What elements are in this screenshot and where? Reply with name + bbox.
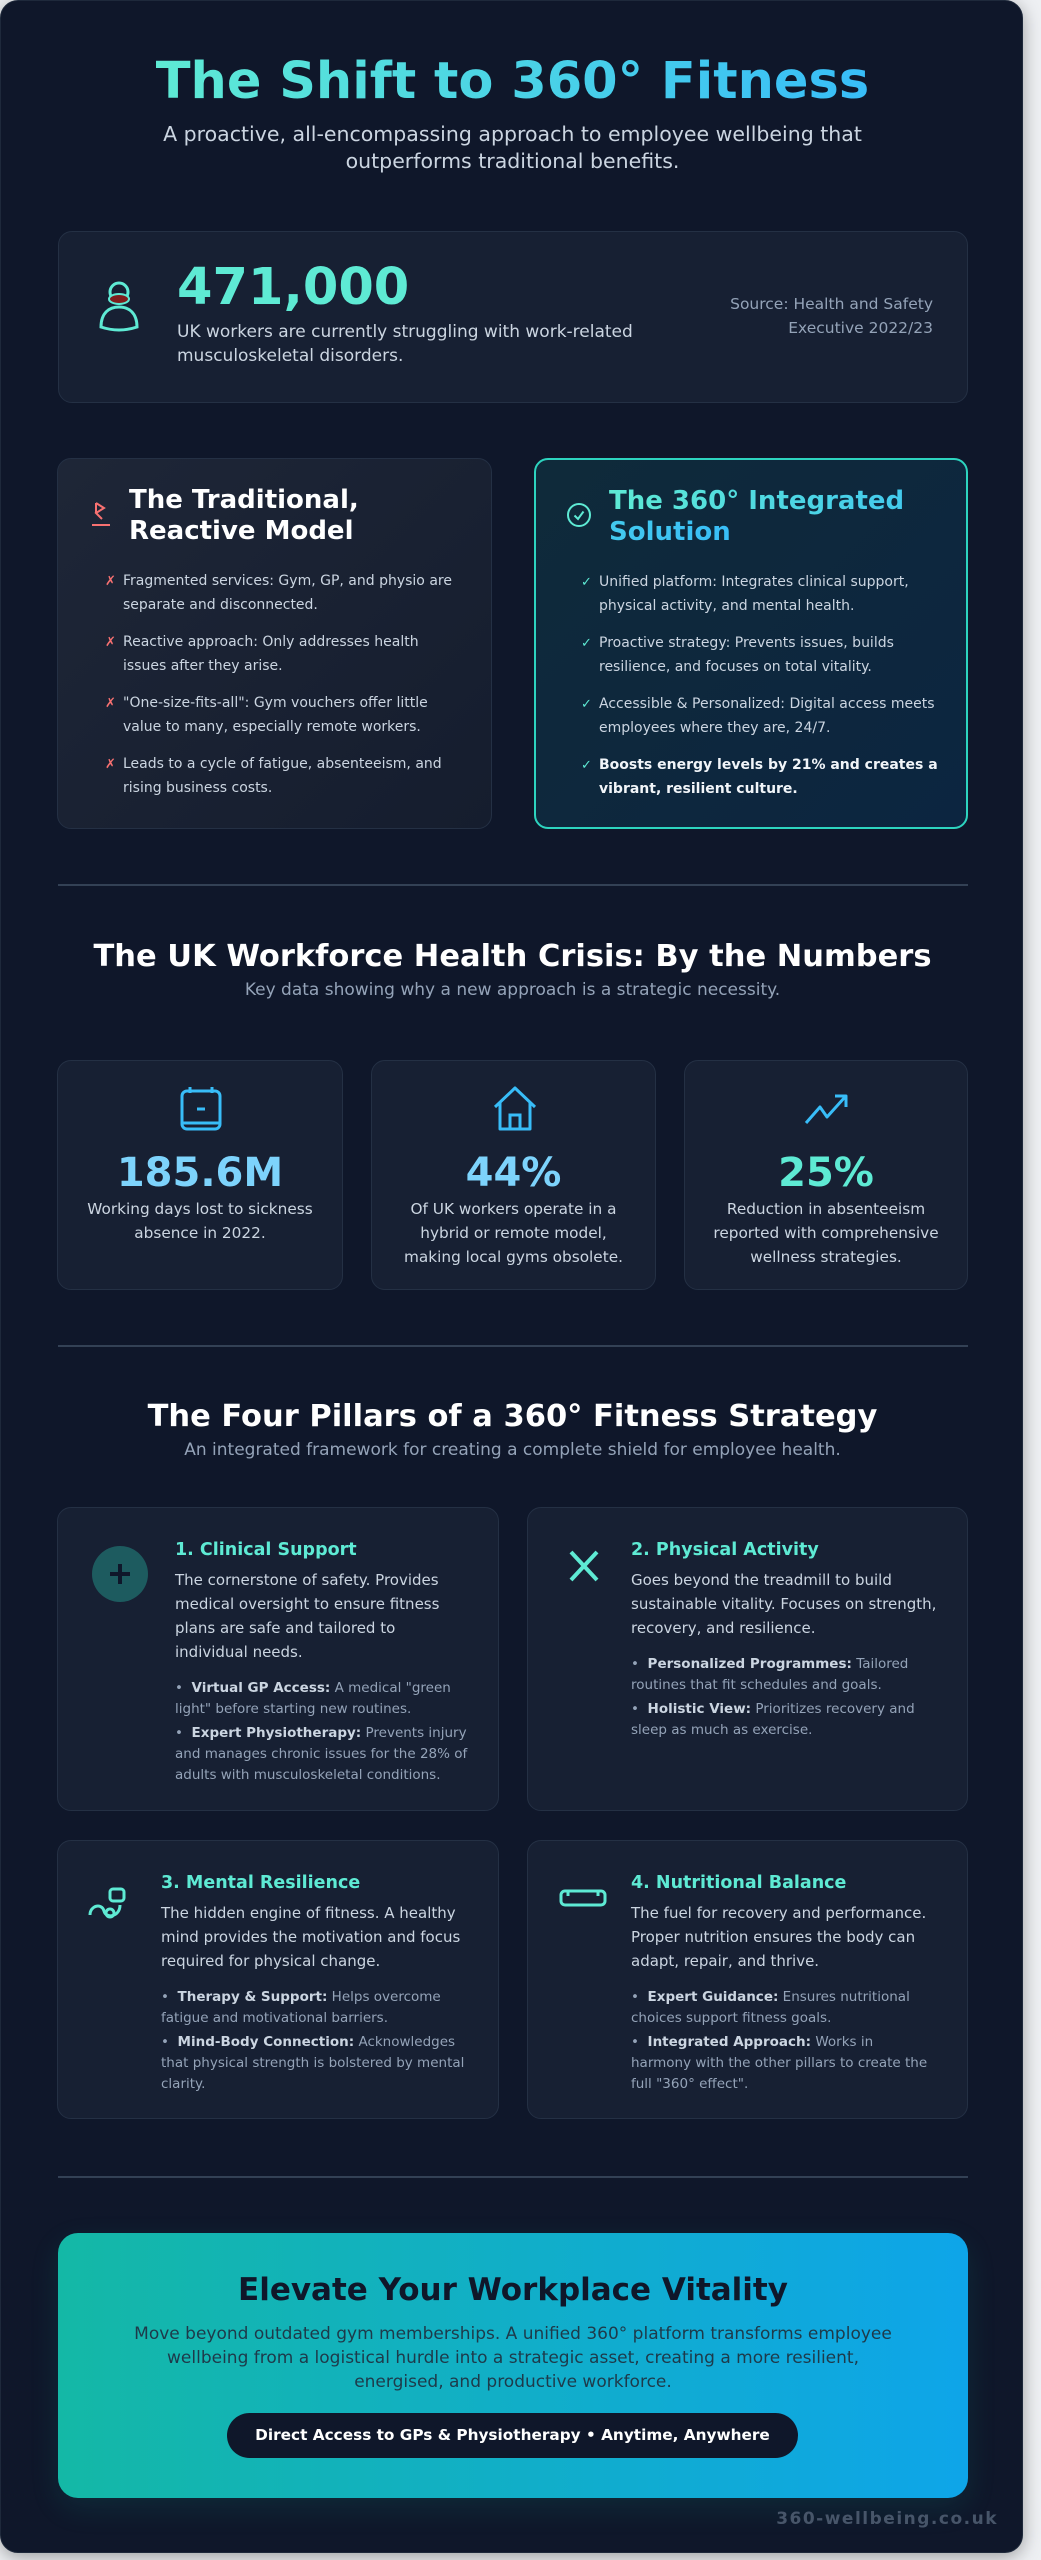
panel: traditional model: [57, 458, 492, 829]
CTA body: Move beyond outdated gym memberships. A unified 360° platform transforms employee wellbeing from a logistical hurdle into a strategic asset, creating a more resilient, energised, and productive workforce.: [134, 2324, 892, 2392]
source: Source: Health and Safety Executive 2022/23: [730, 295, 933, 337]
big number: 471,000: [177, 258, 409, 317]
stat card: absenteeism: Reduction in absenteeism: [727, 1200, 925, 1218]
pillar card: physical activity: Goes beyond the treadmill to build sustainable vitality. Focuses on strength, recovery, and resilience.: [631, 1571, 936, 1637]
heading: Solution: [609, 517, 731, 547]
pillar card: nutrition: • Integrated Approach: Works in harmony with the other pillars to create the full "360° effect".: [631, 2034, 927, 2092]
list: problems: Fragmented services: Gym, GP, and physio are separate and disconnected.: [123, 573, 452, 613]
list: benefits: Boosts energy levels by 21% and creates a vibrant, resilient culture.: [599, 757, 938, 797]
stat card: absenteeism: [684, 1060, 968, 1290]
list: benefits: Proactive strategy: Prevents issues, builds resilience, and focuses on total vitality.: [599, 635, 894, 675]
heading: Reactive Model: [129, 516, 353, 546]
pillar card: clinical support: 1. Clinical Support: [175, 1540, 357, 1560]
panel: 360 solution: ✓: [581, 575, 592, 590]
pillar card: physical activity: 2. Physical Activity: [631, 1540, 819, 1560]
icon: calendar: [180, 1087, 222, 1130]
stat card: days lost: [57, 1060, 343, 1290]
heading: pillars section: An integrated framework for creating a complete shield for employee health.: [184, 1440, 841, 1460]
stat card: absenteeism: 25%: [778, 1150, 874, 1196]
heading: pillars section: [148, 1399, 877, 1460]
stat card: hybrid: 44%: [466, 1150, 561, 1196]
heading: [609, 486, 904, 547]
pillar card: physical activity: • Personalized Programmes: Tailored routines that fit schedules and goals.: [631, 1656, 908, 1693]
icon: house: [494, 1086, 536, 1130]
panel: call to action: [58, 2233, 968, 2498]
list: problems: Reactive approach: Only addresses health issues after they arise.: [123, 634, 419, 674]
pillar card: mental resilience: The hidden engine of fitness. A healthy mind provides the motivation and focus required for physical change.: [161, 1904, 460, 1970]
stat card: hybrid: making local gyms obsolete.: [404, 1248, 623, 1266]
list: benefits: Unified platform: Integrates clinical support, physical activity, and mental health.: [599, 574, 909, 614]
pillar card: clinical support: The cornerstone of safety. Provides medical oversight to ensure fitness plans are safe and tailored to individual needs.: [175, 1571, 439, 1661]
stat card: days lost: 185.6M: [117, 1150, 283, 1196]
panel: 360 solution: ✓: [581, 758, 592, 773]
stat card: days lost: absence in 2022.: [134, 1224, 266, 1242]
panel: 360 solution: ✓: [581, 697, 592, 712]
list: problems: Leads to a cycle of fatigue, absenteeism, and rising business costs.: [123, 756, 442, 796]
icon: check circle: [567, 503, 591, 527]
pillar card: mental resilience: • Mind-Body Connection: Acknowledges that physical strength is bolstered by mental clarity.: [161, 2034, 464, 2092]
pillar card: nutrition: [527, 1840, 968, 2119]
icon: warning: [92, 502, 110, 526]
icon: brain: [88, 1888, 126, 1918]
pillar card: nutrition: • Expert Guidance: Ensures nutritional choices support fitness goals.: [631, 1989, 910, 2026]
pillar card: physical activity: • Holistic View: Prioritizes recovery and sleep as much as exercise.: [631, 1701, 915, 1738]
pillar card: nutrition: The fuel for recovery and performance. Proper nutrition ensures the body can adapt, repair, and thrive.: [631, 1904, 926, 1970]
stat card: hybrid: [371, 1060, 656, 1290]
panel: traditional model: ✗: [105, 696, 116, 711]
heading: numbers section: [93, 939, 932, 1000]
pillar card: clinical support: • Expert Physiotherapy: Prevents injury and manages chronic issues for the 28% of adults with musculoskeletal conditions.: [175, 1725, 467, 1783]
panel: key stat banner: [58, 231, 968, 403]
stat card: hybrid: Of UK workers operate in a: [410, 1200, 616, 1218]
icon: plate: [560, 1890, 606, 1906]
stat card: absenteeism: wellness strategies.: [750, 1248, 902, 1266]
heading: The Traditional,: [129, 485, 359, 515]
icon: medical plus: [92, 1546, 148, 1602]
heading: numbers section: The UK Workforce Health Crisis: By the Numbers: [93, 939, 932, 974]
title: The Shift to 360° Fitness: [156, 52, 869, 111]
panel: 360 solution: ✓: [581, 636, 592, 651]
stat card: days lost: Working days lost to sickness: [87, 1200, 313, 1218]
CTA pill: [227, 2413, 798, 2458]
heading: The 360° Integrated: [609, 486, 904, 516]
panel: traditional model: ✗: [105, 635, 116, 650]
icon: trending up: [805, 1094, 848, 1124]
heading: pillars section: The Four Pillars of a 360° Fitness Strategy: [148, 1399, 877, 1434]
list: benefits: Accessible & Personalized: Digital access meets employees where they are, 24/7.: [599, 696, 935, 736]
stat card: hybrid: hybrid or remote model,: [420, 1224, 607, 1242]
footer url: 360-wellbeing.co.uk: [776, 2509, 998, 2529]
heading: [129, 485, 359, 546]
stat card: absenteeism: reported with comprehensive: [713, 1224, 939, 1242]
pillar card: mental resilience: 3. Mental Resilience: [161, 1873, 360, 1893]
panel: traditional model: ✗: [105, 757, 116, 772]
subtitle: A proactive, all-encompassing approach to employee wellbeing that outperforms traditional benefits.: [163, 122, 862, 173]
panel: traditional model: ✗: [105, 574, 116, 589]
icon: cross dumbbell: [570, 1550, 598, 1582]
CTA heading: Elevate Your Workplace Vitality: [238, 2272, 788, 2308]
panel: 360 solution: [534, 458, 968, 829]
pillar card: mental resilience: [57, 1840, 499, 2119]
pillar card: nutrition: 4. Nutritional Balance: [631, 1873, 846, 1893]
CTA pill: Direct Access to GPs & Physiotherapy • Anytime, Anywhere: [255, 2426, 770, 2444]
description: UK workers are currently struggling with work-related musculoskeletal disorders.: [177, 322, 633, 366]
list: benefits: [581, 574, 938, 797]
heading: numbers section: Key data showing why a new approach is a strategic necessity.: [245, 980, 780, 1000]
icon: person: [100, 282, 138, 332]
pillar card: mental resilience: • Therapy & Support: Helps overcome fatigue and motivational barriers.: [161, 1989, 441, 2026]
pillar card: clinical support: [57, 1507, 499, 1811]
pillar card: clinical support: • Virtual GP Access: A medical "green light" before starting new routines.: [175, 1680, 451, 1717]
list: problems: [105, 573, 452, 796]
pillar card: physical activity: [527, 1507, 968, 1811]
list: problems: "One-size-fits-all": Gym vouchers offer little value to many, especially remote workers.: [123, 695, 428, 735]
